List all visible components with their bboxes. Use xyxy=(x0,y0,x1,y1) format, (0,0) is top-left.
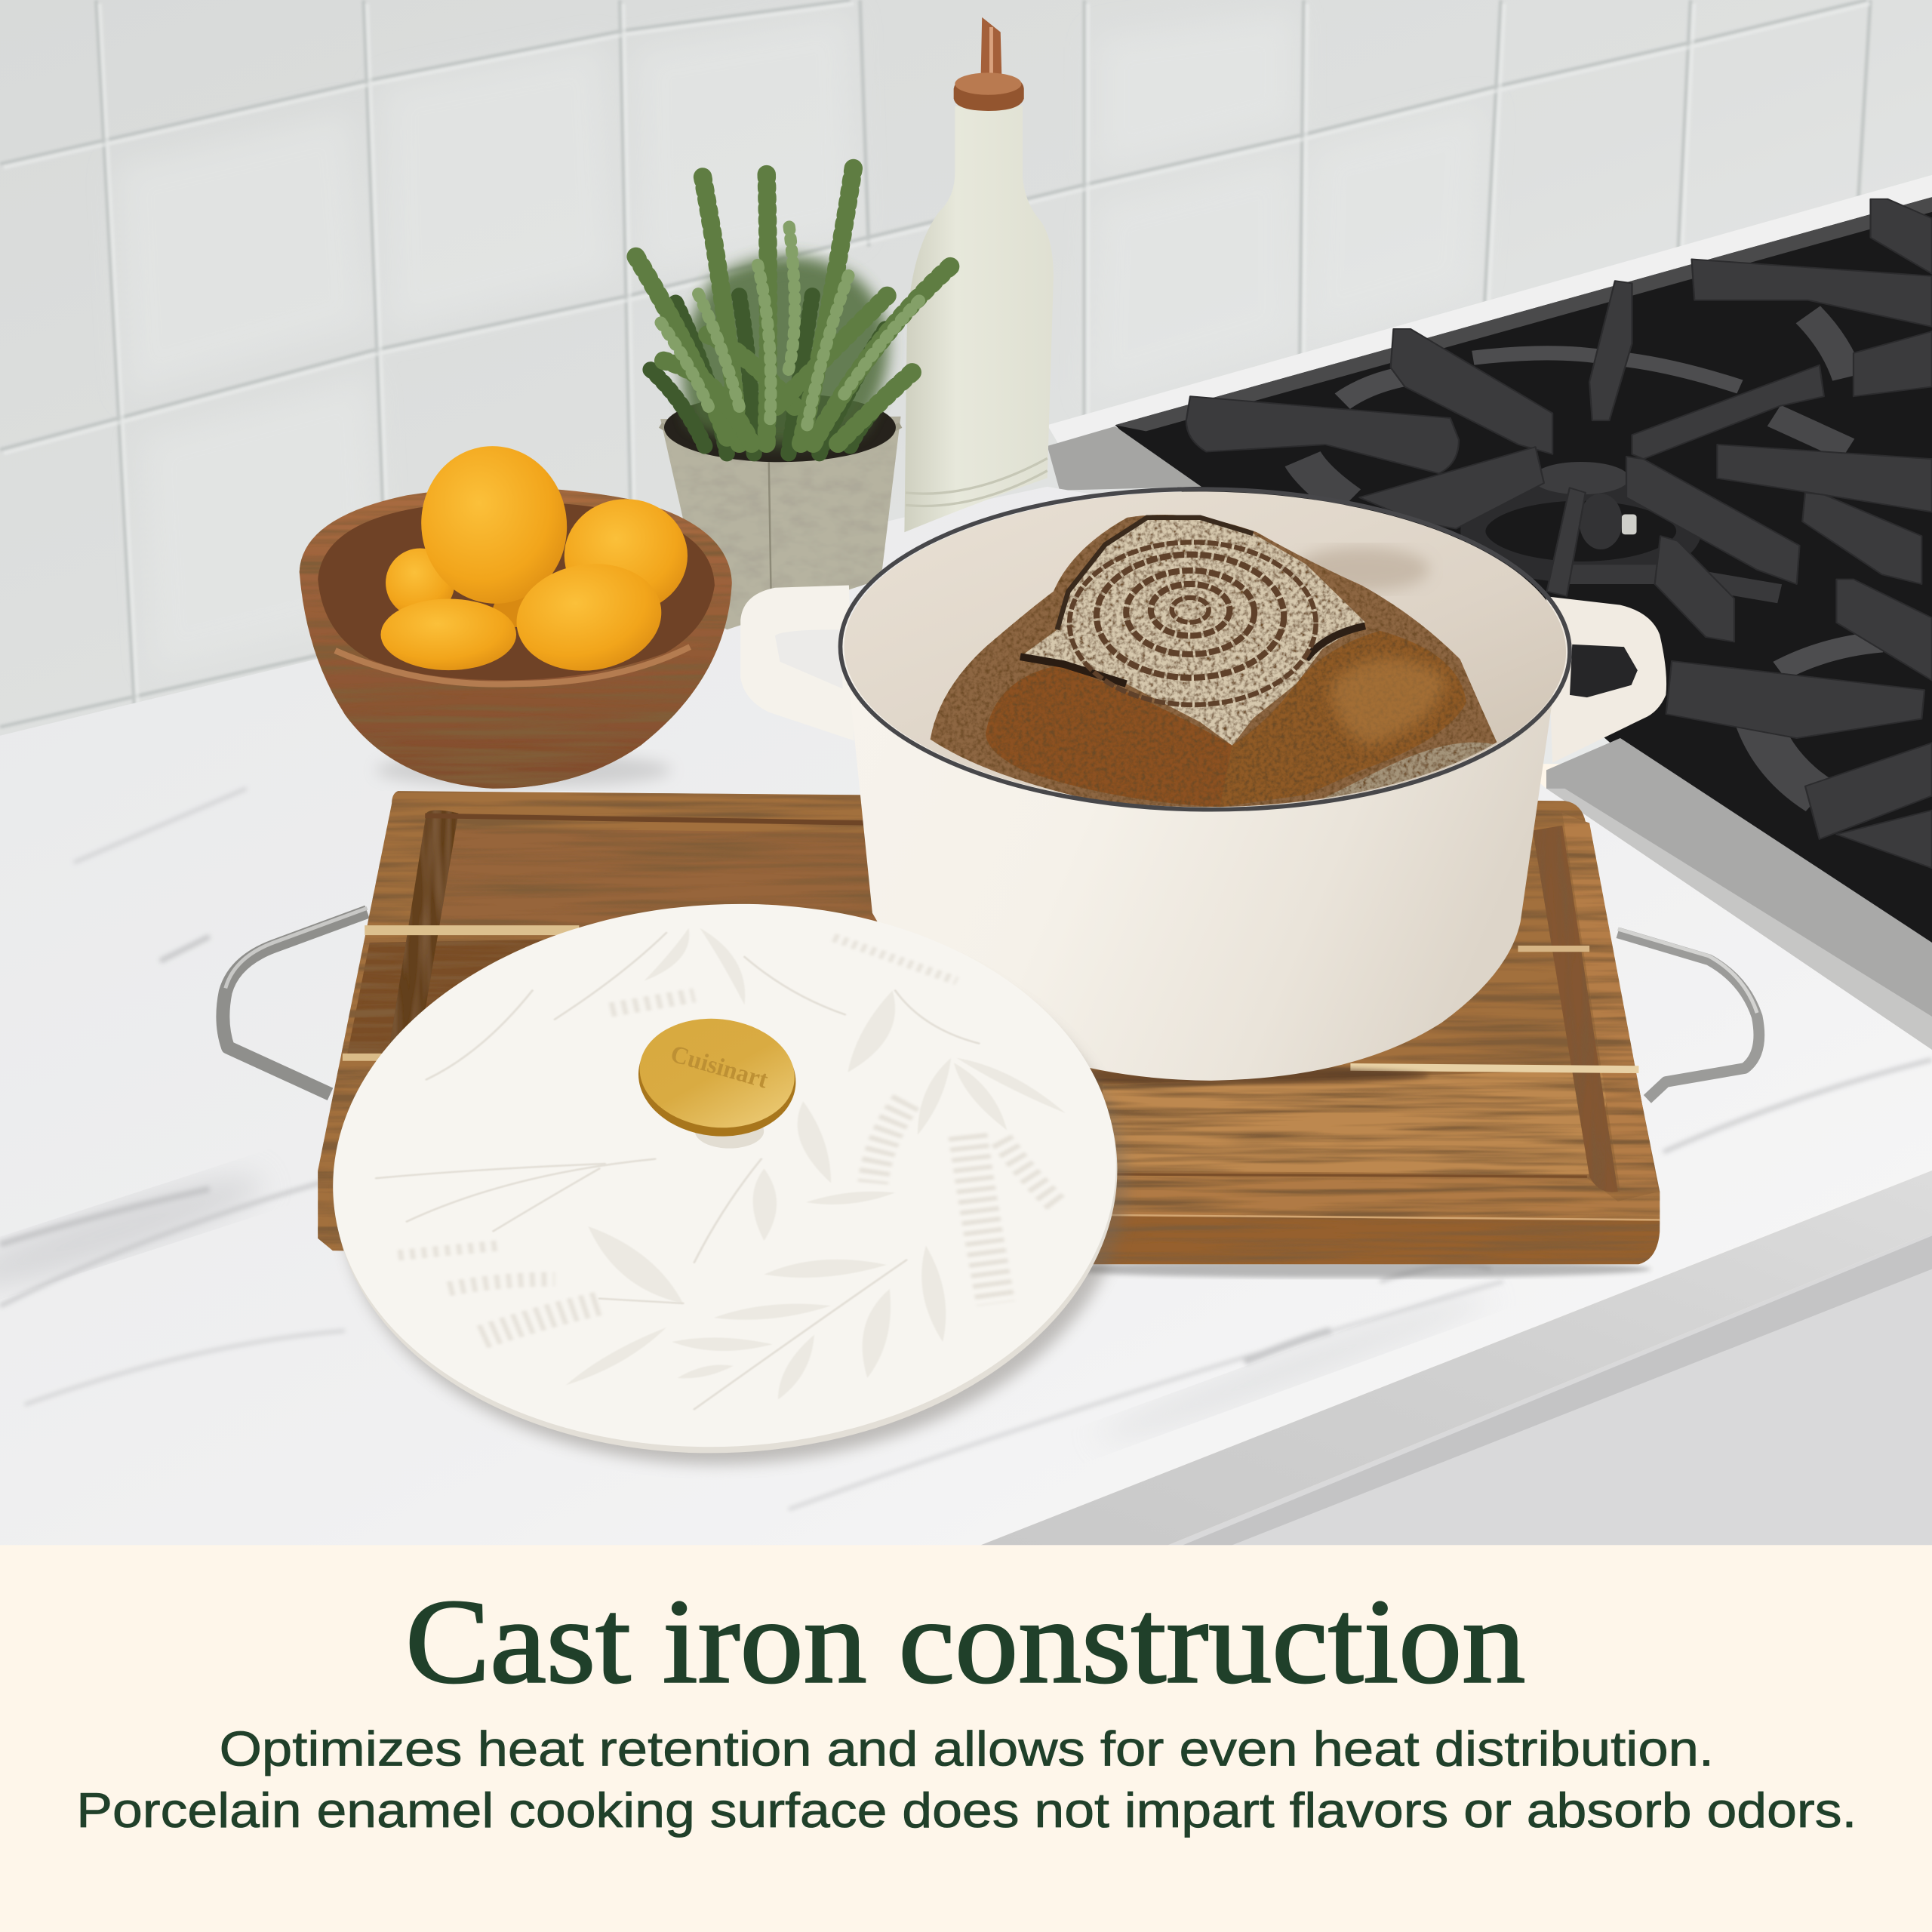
lemons xyxy=(380,437,688,680)
lid xyxy=(319,884,1140,1484)
rosemary foliage xyxy=(635,165,956,454)
dutch oven xyxy=(740,486,1666,1084)
pot body xyxy=(848,666,1558,1081)
gold knob: Cuisinart xyxy=(667,1041,771,1094)
wall tiles xyxy=(0,0,1932,764)
cutting board xyxy=(318,791,1660,1278)
pot rim xyxy=(839,486,1571,813)
embossed botanical relief xyxy=(376,928,1066,1409)
marble counter xyxy=(0,487,1932,1545)
heading: Cast iron construction xyxy=(405,1574,1525,1709)
left handle xyxy=(740,586,854,740)
pot interior xyxy=(843,488,1567,811)
copper cap and spout xyxy=(954,17,1024,111)
stove top xyxy=(1048,175,1932,1050)
counter front edge and cabinet xyxy=(981,1171,1932,1545)
burner and grates xyxy=(1186,199,1932,868)
sourdough loaf xyxy=(931,515,1498,810)
tray handles xyxy=(223,908,1759,1099)
potted herb xyxy=(635,165,956,629)
caption panel xyxy=(0,1545,1932,1932)
pot interior shadow xyxy=(1294,547,1429,592)
right handle xyxy=(1546,596,1666,763)
metal pot xyxy=(660,393,900,629)
wooden bowl with lemons xyxy=(300,437,732,789)
oil bottle xyxy=(904,17,1054,532)
gold knob xyxy=(632,1011,801,1149)
description line two: Porcelain enamel cooking surface does not impart flavors or absorb odors. xyxy=(76,1783,1857,1838)
description line one: Optimizes heat retention and allows for even heat distribution. xyxy=(220,1721,1714,1777)
